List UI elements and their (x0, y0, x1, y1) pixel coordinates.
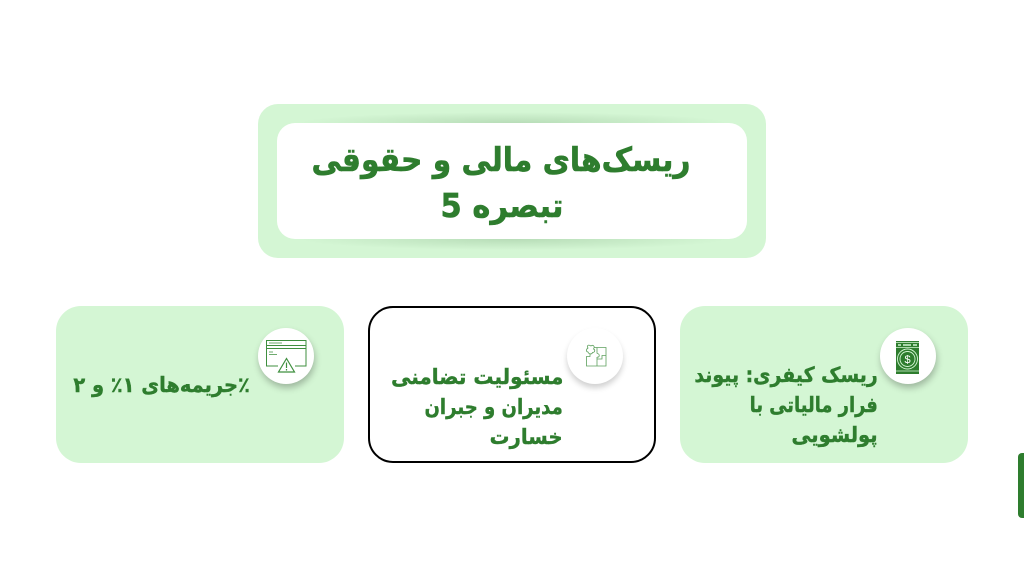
title (312, 140, 690, 226)
text: penalties: ٪جریمه‌های ۱٪ و ۲ (73, 373, 250, 397)
text: joint liability: مدیران و جبران (425, 395, 563, 419)
panel: title banner (258, 104, 766, 258)
panel: penalties card (56, 306, 344, 463)
icon: money laundering machine: $ (904, 354, 911, 366)
title card (277, 123, 747, 239)
inner title card shadow (298, 110, 728, 252)
text: qualitative risk: پولشویی (792, 423, 878, 447)
text: qualitative risk: فرار مالیاتی با (750, 393, 878, 417)
panel: joint liability card (368, 306, 656, 463)
text: joint liability: خسارت (490, 425, 563, 449)
panel: qualitative risk card (680, 306, 968, 463)
side tab (1018, 453, 1024, 518)
title: ریسک‌های مالی و حقوقی (312, 140, 690, 179)
icon: money laundering machine (880, 328, 936, 384)
title: تبصره 5 (441, 186, 563, 225)
icon: browser warning (258, 328, 314, 384)
text: qualitative risk (695, 363, 878, 448)
text: qualitative risk: ریسک کیفری: پیوند (695, 363, 878, 387)
text: joint liability (391, 365, 563, 450)
text: joint liability: مسئولیت تضامنی (391, 365, 563, 389)
icon: puzzle pieces (567, 328, 623, 384)
